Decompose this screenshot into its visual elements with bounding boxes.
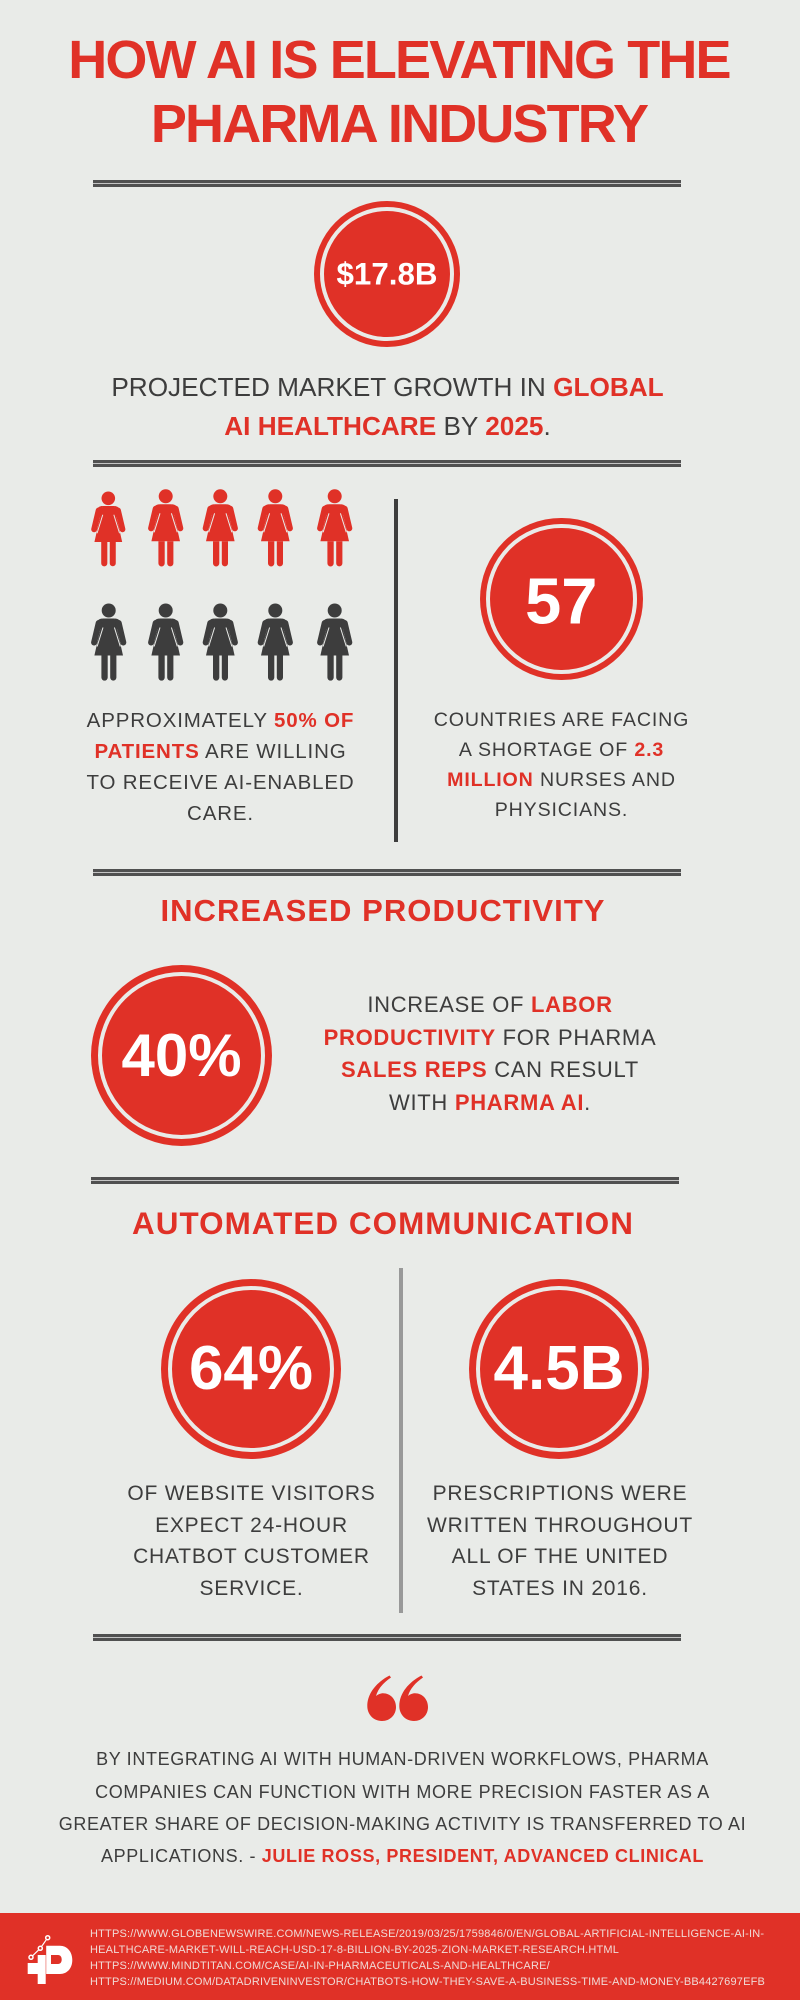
source links: HEALTHCARE-MARKET-WILL-REACH-USD-17-8-BILLION-BY-2025-ZION-MARKET-RESEARCH.HTML: [90, 1944, 619, 1956]
text: projected market growth: AI HEALTHCARE BY 2025.: [224, 411, 551, 441]
text: website visitors: CHATBOT CUSTOMER: [133, 1545, 370, 1568]
text: website visitors: SERVICE.: [199, 1576, 304, 1600]
stat circle: 57: 57: [525, 564, 597, 637]
text: labor productivity: SALES REPS CAN RESULT: [341, 1057, 639, 1082]
text: countries facing shortage: COUNTRIES ARE FACING: [434, 709, 689, 731]
stat circle: 64%: 64%: [189, 1334, 313, 1403]
text: countries facing shortage: A SHORTAGE OF 2.3: [459, 739, 664, 761]
source links: HTTPS://WWW.MINDTITAN.COM/CASE/AI-IN-PHARMACEUTICALS-AND-HEALTHCARE/: [90, 1960, 550, 1972]
icon group: ten women, five red and five dark: [91, 489, 352, 681]
icon: quotation marks: [367, 1676, 428, 1721]
text: 50% of patients: CARE.: [187, 802, 254, 825]
stat circle: 40%: 40%: [121, 1022, 242, 1089]
logo: [28, 1935, 72, 1984]
text: labor productivity: WITH PHARMA AI.: [389, 1090, 591, 1115]
stat circle: $17.8B: $17.8B: [337, 256, 437, 291]
text: projected market growth: PROJECTED MARKET GROWTH IN GLOBAL: [111, 372, 664, 402]
text: 50% of patients: PATIENTS ARE WILLING: [94, 740, 347, 763]
vertical divider gray: [398, 1268, 402, 1613]
text: countries facing shortage: MILLION NURSES AND: [447, 769, 676, 791]
stat circle: 40%: [91, 964, 272, 1146]
quote text: APPLICATIONS. - JULIE ROSS, PRESIDENT, ADVANCED CLINICAL: [101, 1846, 704, 1866]
text: prescriptions: [427, 1482, 693, 1600]
source links: HTTPS://MEDIUM.COM/DATADRIVENINVESTOR/CHATBOTS-HOW-THEY-SAVE-A-BUSINESS-TIME-AND-MONEY-BB4427697EFB: [90, 1976, 765, 1988]
text: labor productivity: PRODUCTIVITY FOR PHARMA: [324, 1025, 656, 1050]
text: prescriptions: ALL OF THE UNITED: [452, 1545, 668, 1568]
text: website visitors: EXPECT 24-HOUR: [155, 1514, 348, 1536]
heading: increased productivity: INCREASED PRODUCTIVITY: [160, 893, 606, 928]
text: 50% of patients: APPROXIMATELY 50% OF: [87, 709, 354, 732]
text: projected market growth: [111, 372, 664, 441]
text: prescriptions: WRITTEN THROUGHOUT: [427, 1514, 693, 1536]
quote text: [59, 1749, 746, 1866]
vertical divider: [394, 499, 398, 842]
text: labor productivity: INCREASE OF LABOR: [367, 992, 613, 1017]
red women row: [94, 489, 349, 566]
stat circle: 57: [480, 518, 642, 680]
text: 50% of patients: [86, 709, 355, 825]
stat circle: 4.5B: 4.5B: [494, 1334, 624, 1403]
source links: [90, 1928, 765, 1988]
text: countries facing shortage: PHYSICIANS.: [495, 799, 628, 821]
text: countries facing shortage: [434, 709, 689, 821]
text: website visitors: [127, 1482, 376, 1600]
text: 50% of patients: TO RECEIVE AI-ENABLED: [86, 771, 355, 794]
stat circle: $17.8B: [314, 201, 460, 347]
source links: HTTPS://WWW.GLOBENEWSWIRE.COM/NEWS-RELEASE/2019/03/25/1759846/0/EN/GLOBAL-ARTIFICIAL-INTELLIGENCE-AI-IN-: [90, 1928, 764, 1940]
quote text: GREATER SHARE OF DECISION-MAKING ACTIVITY IS TRANSFERRED TO AI: [59, 1814, 746, 1834]
stat circle: 4.5B: [469, 1279, 649, 1459]
quote text: BY INTEGRATING AI WITH HUMAN-DRIVEN WORKFLOWS, PHARMA: [96, 1749, 709, 1769]
text: prescriptions: STATES IN 2016.: [472, 1576, 648, 1600]
text: website visitors: OF WEBSITE VISITORS: [127, 1482, 376, 1505]
quote text: COMPANIES CAN FUNCTION WITH MORE PRECISION FASTER AS A: [95, 1782, 710, 1802]
text: labor productivity: [324, 992, 656, 1115]
footer band: [0, 1913, 800, 2000]
stat circle: 64%: [161, 1279, 341, 1459]
title: HOW AI IS ELEVATING THE: [68, 30, 730, 90]
title: PHARMA INDUSTRY: [151, 94, 647, 154]
heading: automated communication: AUTOMATED COMMUNICATION: [132, 1206, 634, 1241]
title: [68, 30, 730, 154]
dark women row: [94, 604, 349, 681]
text: prescriptions: PRESCRIPTIONS WERE: [433, 1482, 687, 1505]
